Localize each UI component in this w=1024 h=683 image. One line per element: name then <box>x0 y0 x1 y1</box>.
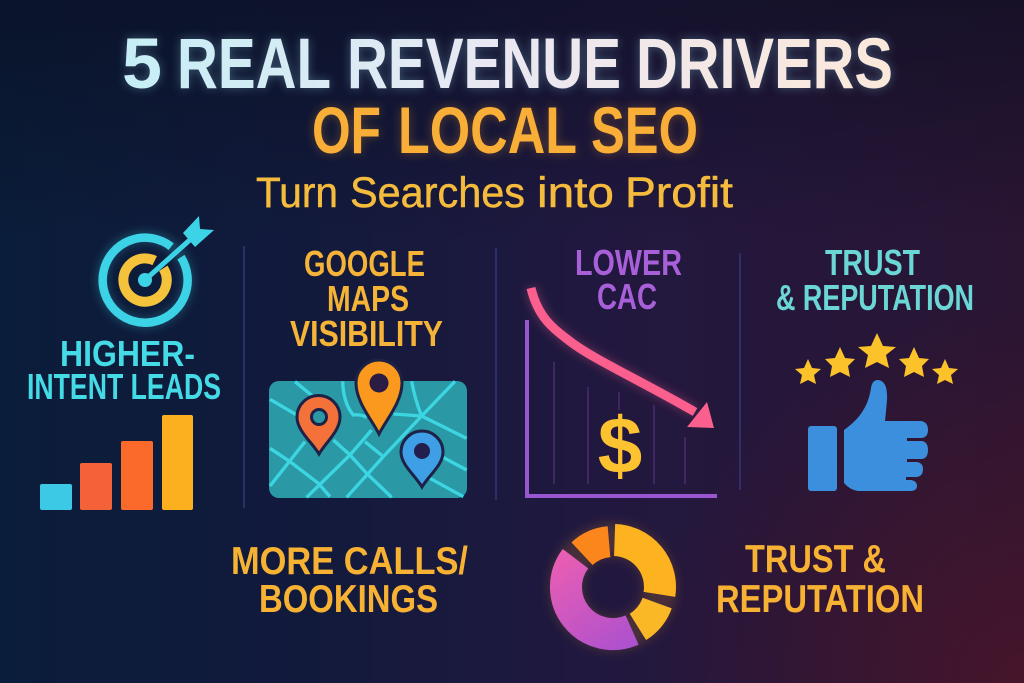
panel: more calls and bookings <box>231 540 468 621</box>
icon: thumbs up <box>808 380 928 491</box>
title: REVENUE <box>347 25 621 104</box>
icon: red pin <box>297 396 340 454</box>
label: lower cac: CAC <box>597 276 657 317</box>
label: trust and reputation: TRUST <box>825 242 920 283</box>
icon: five stars <box>795 333 958 384</box>
icon: dollar sign: $ <box>598 401 642 490</box>
label: trust and reputation bottom <box>716 538 924 621</box>
label: higher-intent leads <box>27 333 221 407</box>
icon: map with pins <box>269 360 467 498</box>
label: lower cac: LOWER <box>575 242 682 283</box>
title: 5 <box>122 25 162 104</box>
label: google maps visibility: GOOGLE <box>304 243 425 284</box>
title <box>122 25 893 167</box>
icon: orange pin <box>356 360 402 434</box>
panel: more calls and bookings: MORE CALLS/ <box>231 540 468 583</box>
line chart axes <box>527 320 717 496</box>
label: trust and reputation bottom: TRUST & <box>745 538 886 581</box>
subtitle: into <box>537 169 614 217</box>
label: higher-intent leads: HIGHER- <box>60 333 195 374</box>
label: trust and reputation bottom: REPUTATION <box>716 578 924 621</box>
panel: google maps visibility <box>269 243 467 498</box>
arrow: falling cost curve <box>531 288 714 428</box>
label: google maps visibility: MAPS <box>327 278 409 319</box>
title: SEO <box>591 93 698 167</box>
title: LOCAL <box>398 93 577 167</box>
icon: donut chart <box>566 540 660 634</box>
title: DRIVERS <box>636 25 893 104</box>
title: OF <box>312 93 381 167</box>
bar chart <box>40 415 193 510</box>
label: lower cac <box>575 242 682 317</box>
panel: more calls and bookings: BOOKINGS <box>259 578 438 621</box>
label: trust and reputation <box>776 242 974 318</box>
subtitle: Profit <box>625 169 733 217</box>
label: higher-intent leads: INTENT LEADS <box>27 366 221 407</box>
panel: trust and reputation <box>776 242 974 491</box>
title: REAL <box>177 25 331 104</box>
subtitle: Searches <box>350 169 525 217</box>
icon: blue pin <box>401 431 443 487</box>
panel: lower cac <box>527 242 717 496</box>
label: google maps visibility: VISIBILITY <box>290 313 443 354</box>
label: google maps visibility <box>290 243 443 354</box>
subtitle: Turn <box>256 169 338 217</box>
panel: higher-intent leads <box>27 216 221 510</box>
subtitle <box>256 169 733 217</box>
icon: target with arrow <box>102 216 214 323</box>
